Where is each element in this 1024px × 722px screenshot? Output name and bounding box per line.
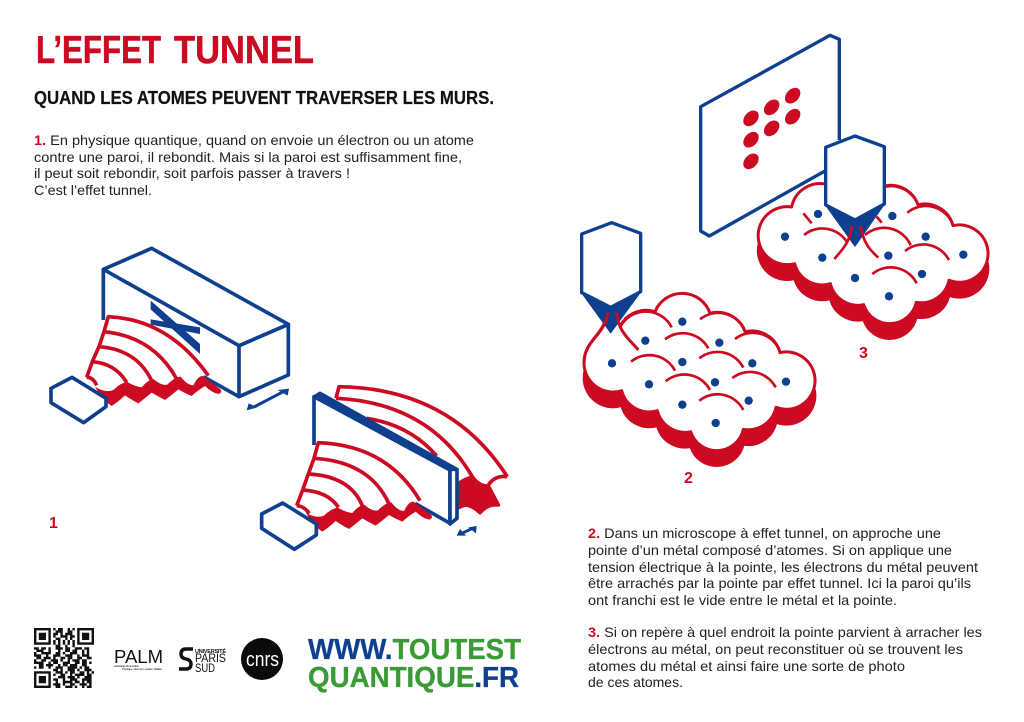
atom arcs bbox=[620, 312, 781, 410]
electron dots bbox=[781, 210, 967, 300]
metal surface bbox=[758, 166, 988, 324]
text block 2: être arrachés par la pointe par effet tunnel. Ici la paroi qu’ils bbox=[588, 575, 971, 591]
illustration: thin wall with tunnelling wave bbox=[262, 387, 507, 549]
reflected wave arcs bbox=[87, 317, 208, 385]
title bbox=[36, 29, 314, 72]
metal surface shadow bbox=[758, 181, 988, 339]
title: TUNNEL bbox=[174, 29, 314, 72]
illustration 2: tip and metal surface bbox=[582, 223, 815, 466]
blocked cross mark bbox=[151, 301, 200, 354]
incident wave band bbox=[306, 502, 432, 532]
logo: PALM: Laboratoire Aimé Cotton bbox=[114, 664, 139, 668]
tip bbox=[582, 223, 641, 333]
text block 1: C’est l’effet tunnel. bbox=[34, 182, 152, 198]
double arrow bbox=[247, 389, 289, 410]
metal surface bbox=[584, 293, 815, 451]
metal surface shadow bbox=[584, 308, 815, 466]
subtitle: QUAND LES ATOMES PEUVENT TRAVERSER LES MURS. bbox=[34, 88, 494, 108]
atom image spots bbox=[740, 85, 803, 172]
website address: QUANTIQUE.FR bbox=[308, 662, 519, 694]
tunnelling electron paths bbox=[584, 313, 638, 363]
electron source hexagon bbox=[262, 503, 316, 549]
screen bbox=[701, 35, 839, 236]
label 3: 3 bbox=[859, 345, 868, 362]
QR code bbox=[34, 628, 94, 688]
atom arcs bbox=[803, 186, 953, 283]
logo: CNRS: cnrs bbox=[246, 649, 279, 671]
website address bbox=[308, 634, 521, 694]
label 2: 2 bbox=[684, 470, 693, 487]
text block 1: il peut soit rebondir, soit parfois passer à travers ! bbox=[34, 165, 350, 181]
electron source hexagon bbox=[51, 377, 106, 423]
text block 2 bbox=[588, 525, 978, 608]
transmitted wave bbox=[336, 387, 507, 513]
text block 2: ont franchi est le vide entre le métal et la pointe. bbox=[588, 592, 897, 608]
tip bbox=[826, 136, 884, 246]
logo: Université Paris Sud: PARIS bbox=[195, 651, 226, 665]
text block 3: électrons au métal, on peut reconstituer où se trouvent les bbox=[588, 641, 963, 657]
text block 1: contre une paroi, il rebondit. Mais si la paroi est suffisamment fine, bbox=[34, 149, 462, 165]
tunnelling electron paths bbox=[834, 226, 878, 259]
illustration 3: screen, tip and metal surface bbox=[701, 35, 988, 339]
text block 1 bbox=[34, 132, 474, 198]
logo: Université Paris Sud: UNIVERSITÉ bbox=[195, 647, 226, 655]
wave band bbox=[95, 376, 221, 406]
logo: CNRS bbox=[241, 638, 283, 680]
logo: Université Paris Sud: SUD bbox=[195, 661, 215, 675]
text block 3: de ces atomes. bbox=[588, 674, 683, 690]
double arrow bbox=[457, 526, 477, 536]
website address: WWW.TOUTEST bbox=[308, 634, 521, 666]
electron dots bbox=[608, 317, 790, 427]
text block 3: atomes du métal et ainsi faire une sorte de photo bbox=[588, 658, 905, 674]
text block 3: 3. Si on repère à quel endroit la pointe parvient à arracher les bbox=[588, 624, 982, 640]
illustration: thick wall reflecting the wave bbox=[51, 248, 289, 423]
logo: PALM: Physique : Atomes, Lumière, Matière bbox=[122, 667, 162, 671]
text block 1: 1. En physique quantique, quand on envoie un électron ou un atome bbox=[34, 132, 474, 148]
wave arcs before the wall bbox=[297, 443, 420, 513]
thin wall plate bbox=[314, 393, 457, 524]
text block 2: tension électrique à la pointe, les électrons du métal peuvent bbox=[588, 559, 978, 575]
title: L’EFFET bbox=[36, 29, 161, 72]
text block 3 bbox=[588, 624, 982, 690]
text block 2: pointe d’un métal composé d’atomes. Si on applique une bbox=[588, 542, 952, 558]
label 1: 1 bbox=[49, 515, 58, 532]
text block 2: 2. Dans un microscope à effet tunnel, on approche une bbox=[588, 525, 941, 541]
logo: PALM: PALM bbox=[114, 647, 163, 667]
logo: Université Paris Sud bbox=[179, 647, 226, 675]
thick wall block bbox=[103, 248, 288, 397]
